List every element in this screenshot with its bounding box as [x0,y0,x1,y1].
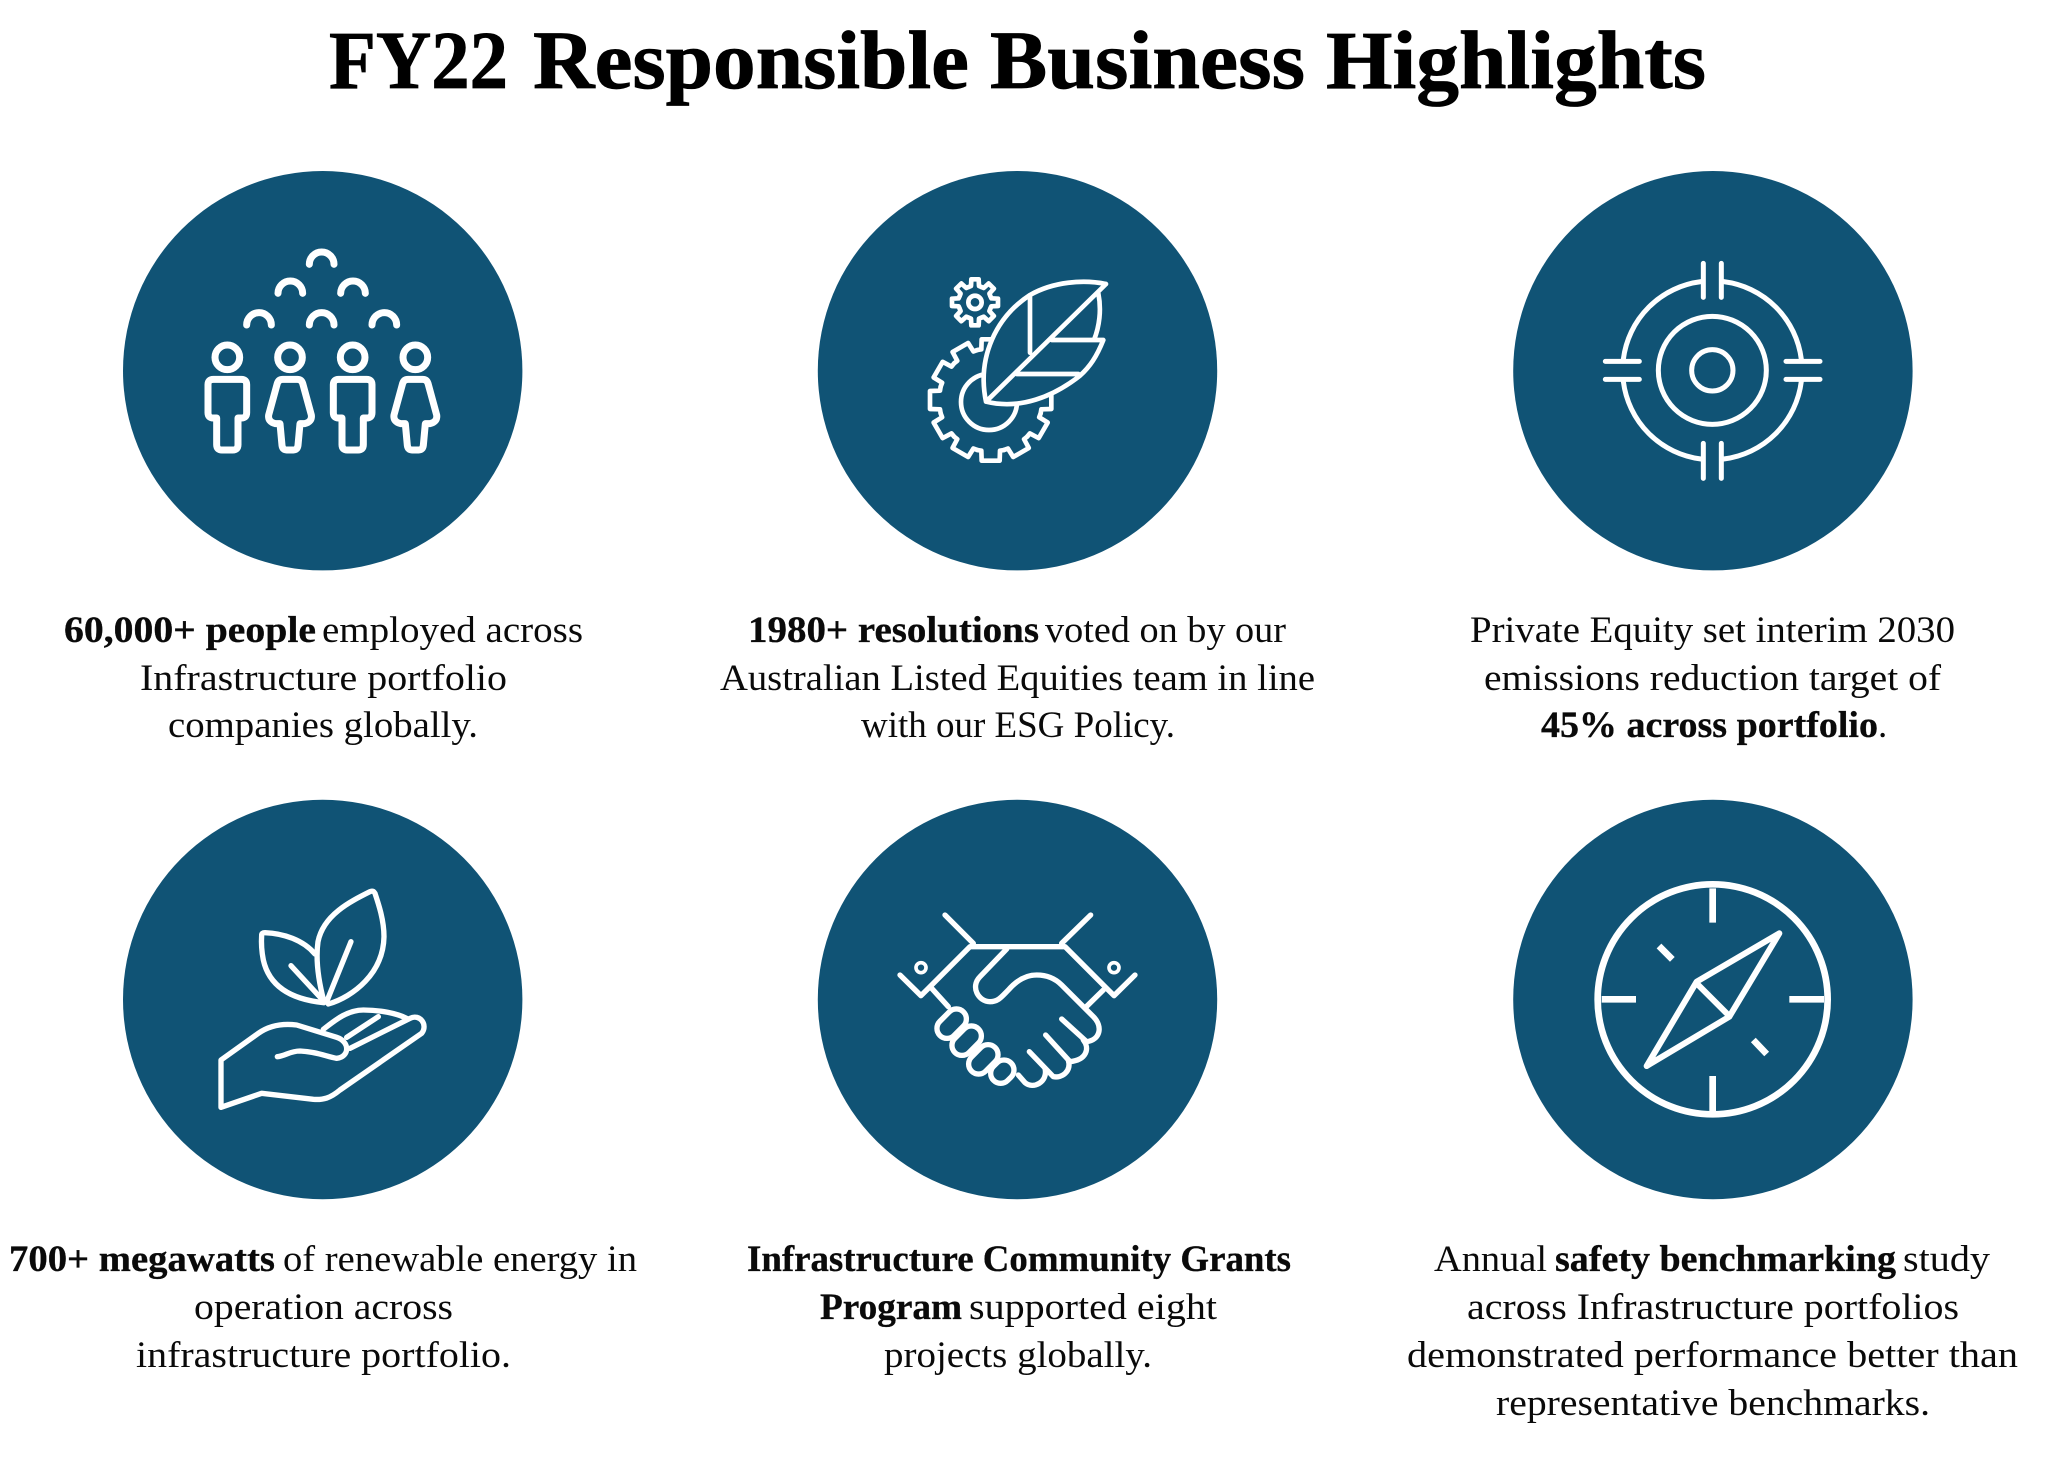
circle badge: target [1513,171,1913,570]
panel: renewable energy [9,800,637,1376]
circle badge: ESG [818,171,1217,570]
text: renewable energy: 700+ megawatts [9,1239,275,1280]
icon: group of people [208,252,437,450]
title: FY22 [329,14,508,106]
text: resolutions voted: 1980+ resolutions [748,610,1039,651]
icon: gears and leaf [930,279,1106,461]
circle badge: safety [1513,800,1913,1199]
text: people employed [64,610,583,746]
text: renewable energy: infrastructure portfolio. [136,1335,511,1376]
circle badge: renewable [123,800,522,1199]
text: safety benchmarking: across Infrastructure portfolios [1467,1287,1959,1328]
text: safety benchmarking: Annual [1434,1239,1547,1280]
panel: people employed [64,171,583,746]
text: community grants: projects globally. [884,1335,1152,1376]
text: renewable energy: of renewable energy in [283,1239,637,1280]
text: people employed: companies globally. [168,705,478,746]
text: emissions target: Private Equity set interim 2030 [1470,610,1955,651]
text: safety benchmarking: study [1903,1239,1991,1280]
title [329,14,1706,106]
text: community grants: supported eight [969,1287,1218,1328]
text: resolutions voted [720,610,1315,746]
panel: safety benchmarking [1407,800,2018,1424]
text: resolutions voted: Australian Listed Equities team in line [720,658,1315,699]
text: safety benchmarking: safety benchmarking [1555,1239,1896,1280]
text: renewable energy [9,1239,637,1376]
text: resolutions voted: voted on by our [1045,610,1286,651]
text: safety benchmarking [1407,1239,2018,1424]
text: people employed: 60,000+ people [64,610,316,651]
circle badge: community [818,800,1217,1199]
text: safety benchmarking: demonstrated performance better than [1407,1335,2018,1376]
icon: crosshair target [1605,263,1820,478]
text: community grants [747,1239,1291,1376]
title: Highlights [1326,14,1706,106]
panel: community grants [747,800,1291,1376]
text: emissions target: . [1878,705,1887,746]
title: Business [990,14,1305,106]
text: community grants: Infrastructure Community Grants [747,1239,1291,1280]
text: people employed: Infrastructure portfolio [140,658,507,699]
text: community grants: Program [820,1287,962,1328]
text: emissions target: emissions reduction target of [1484,658,1942,699]
text: safety benchmarking: representative benchmarks. [1496,1383,1930,1424]
circle badge: people [123,171,522,570]
text: emissions target: 45% across portfolio [1541,705,1878,746]
text: resolutions voted: with our ESG Policy. [861,705,1175,746]
title: Responsible [533,14,969,106]
text: renewable energy: operation across [194,1287,453,1328]
panel: emissions target [1470,171,1955,746]
text: emissions target [1470,610,1955,746]
panel: resolutions voted [720,171,1315,746]
icon: hand holding plant [221,891,424,1107]
text: people employed: employed across [322,610,583,651]
icon: handshake [900,915,1135,1087]
icon: compass [1598,884,1828,1114]
